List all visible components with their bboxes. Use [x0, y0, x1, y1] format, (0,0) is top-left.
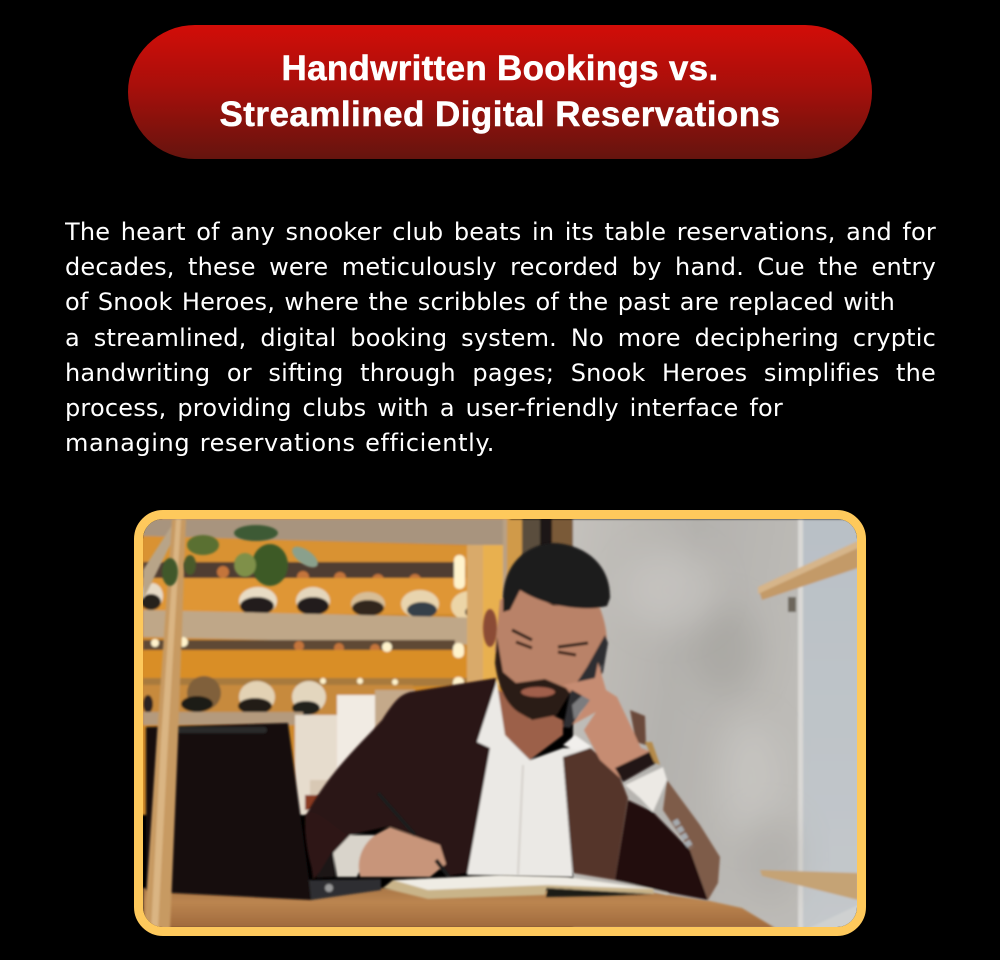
- notebook: [383, 875, 654, 899]
- wooden pole and branch: [143, 519, 186, 930]
- brows and eyes: [512, 630, 532, 640]
- table: [143, 888, 775, 928]
- chair: [615, 853, 668, 895]
- phone: [563, 635, 608, 728]
- collar tips: [563, 735, 592, 750]
- shirt: [467, 680, 590, 877]
- shoulder behind hand: [630, 710, 646, 745]
- man: [305, 543, 720, 900]
- jacket right sleeve dark: [615, 800, 708, 900]
- neck: [498, 690, 563, 760]
- sleeve buttons: [675, 820, 691, 848]
- face: [495, 590, 607, 720]
- pencil: [378, 793, 449, 877]
- title line 1: Handwritten Bookings vs.: [282, 49, 718, 88]
- body paragraph: handwriting or sifting through pages; Snook Heroes simplifies the: [65, 359, 936, 387]
- body paragraph: The heart of any snooker club beats in its table reservations, and for: [65, 218, 936, 246]
- lower plank: [143, 712, 303, 725]
- background shelving: [140, 515, 860, 930]
- dark band: [143, 562, 455, 579]
- bottles top row: [141, 583, 489, 621]
- left cuff: [333, 835, 375, 877]
- watch: [615, 750, 658, 782]
- ear: [483, 609, 497, 647]
- middle plank: [143, 610, 490, 645]
- title line 2: Streamlined Digital Reservations: [220, 95, 780, 134]
- upper orange shelf: [143, 536, 470, 566]
- body paragraph: process, providing clubs with a user-friendly interface for: [65, 394, 783, 422]
- jacket left sleeve and body: [305, 678, 496, 880]
- body paragraph: decades, these were meticulously recorded by hand. Cue the entry: [65, 253, 936, 281]
- title banner: [128, 25, 872, 159]
- body paragraph: of Snook Heroes, where the scribbles of the past are replaced with: [65, 288, 895, 316]
- peach and yellow posts: [467, 545, 483, 685]
- window shelves: [758, 541, 858, 600]
- shirt placket: [518, 765, 523, 875]
- second orange shelf: [143, 578, 488, 614]
- beard: [495, 637, 570, 720]
- bright window area: [295, 715, 415, 815]
- lips: [521, 687, 555, 697]
- bottles lower row: [143, 676, 326, 715]
- wall and window: [573, 519, 803, 929]
- writing hand: [359, 827, 446, 877]
- jacket right lapel: [563, 748, 628, 880]
- body paragraph: a streamlined, digital booking system. No more deciphering cryptic: [65, 324, 936, 352]
- jacket right sleeve tan: [663, 780, 720, 900]
- shelf lights: [151, 555, 465, 690]
- laptop: [146, 723, 381, 900]
- plant: [162, 525, 321, 586]
- hair: [503, 543, 610, 612]
- top beam: [143, 519, 510, 546]
- body paragraph: [65, 218, 936, 457]
- hand on phone: [563, 662, 652, 778]
- photo: man on phone writing a booking by hand, in a yellow rounded frame: [134, 510, 866, 936]
- right cuff: [625, 767, 667, 812]
- third orange shelf: [143, 650, 468, 680]
- dark strip: [143, 640, 455, 652]
- body paragraph: managing reservations efficiently.: [65, 429, 495, 457]
